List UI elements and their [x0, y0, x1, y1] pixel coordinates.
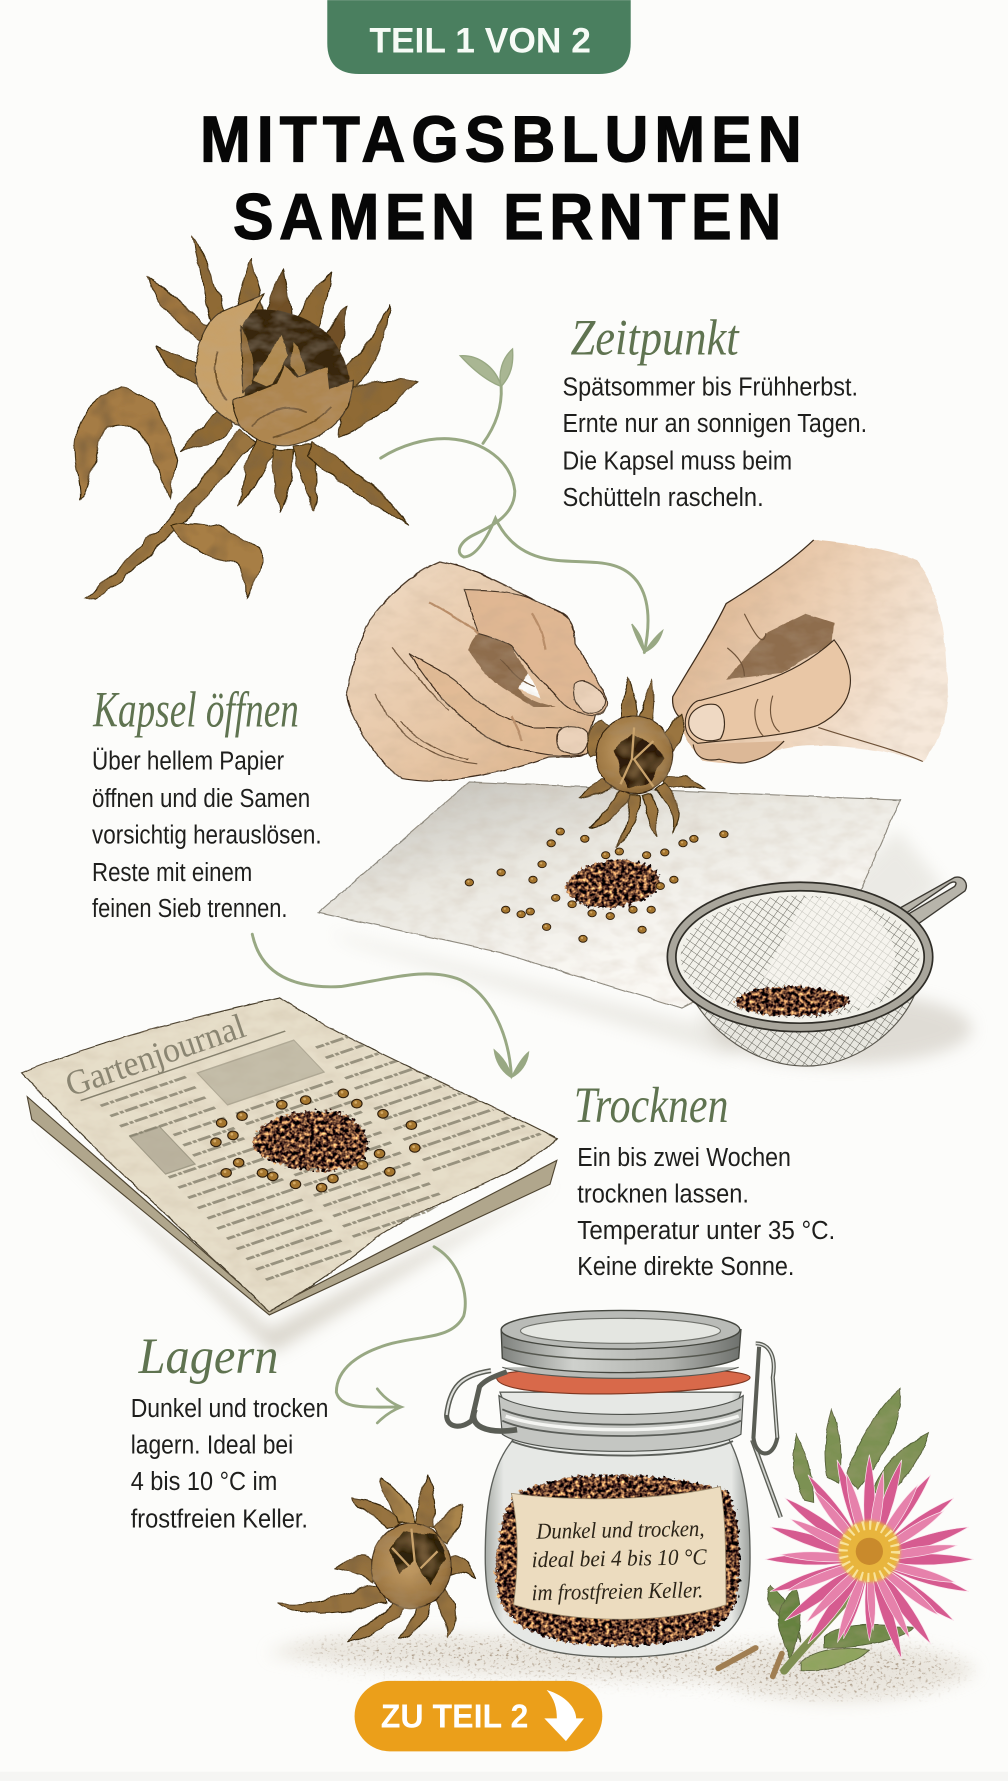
heading and text: Zeitpunkt: Ernte nur an sonnigen Tagen. [563, 410, 867, 438]
heading and text: Lagern: lagern. Ideal bei [131, 1432, 293, 1460]
heading and text: Kapsel oeffnen: feinen Sieb trennen. [92, 895, 288, 923]
illustration: jar with seeds and label [447, 1310, 781, 1657]
title [200, 104, 808, 253]
ground shadow and soil [267, 1633, 977, 1702]
title: MITTAGSBLUMEN [200, 104, 808, 176]
icon: curved down arrow [544, 1690, 584, 1741]
heading and text: Zeitpunkt: Die Kapsel muss beim [563, 447, 792, 475]
button: zu Teil 2: ZU TEIL 2 [381, 1697, 528, 1734]
illustration: pink flower with leaves [718, 1389, 974, 1676]
heading and text: Trocknen: Trocknen [574, 1077, 728, 1134]
heading and text: Kapsel oeffnen: Kapsel öffnen [92, 681, 299, 738]
title: SAMEN ERNTEN [233, 181, 787, 253]
heading and text: Kapsel oeffnen: Über hellem Papier [92, 747, 285, 775]
heading and text: Trocknen [574, 1077, 835, 1281]
heading and text: Zeitpunkt: Spätsommer bis Frühherbst. [563, 374, 858, 402]
heading and text: Lagern: 4 bis 10 °C im [131, 1468, 277, 1496]
illustration: paper with seeds [318, 782, 943, 1057]
heading and text: Kapsel oeffnen: vorsichtig herauslösen. [92, 821, 322, 849]
heading and text: Trocknen: trocknen lassen. [577, 1180, 749, 1208]
heading and text: Trocknen: Keine direkte Sonne. [577, 1253, 794, 1281]
illustration: jar with seeds and label: ideal bei 4 bis 10 °C [531, 1544, 708, 1572]
heading and text: Trocknen: Temperatur unter 35 °C. [577, 1217, 835, 1245]
button: zu Teil 2 [355, 1681, 602, 1751]
arrow: Zeitpunkt to hands [381, 349, 663, 652]
heading and text: Zeitpunkt: Schütteln rascheln. [563, 484, 764, 512]
illustration: jar with seeds and label: im frostfreien Keller. [531, 1577, 703, 1605]
illustration: jar with seeds and label: Dunkel und trocken, [535, 1516, 705, 1544]
heading and text: Lagern: frostfreien Keller. [131, 1505, 308, 1533]
tab: Teil 1 von 2 [327, 0, 631, 74]
illustration: sieve with seeds [672, 877, 972, 1066]
illustration: capsule held between fingers [580, 676, 705, 847]
illustration: left hand [347, 562, 608, 781]
illustration: right hand [673, 540, 948, 763]
heading and text: Lagern: Dunkel und trocken [131, 1395, 328, 1423]
heading and text: Kapsel oeffnen [92, 681, 322, 923]
illustration: dried capsule on ground [278, 1474, 475, 1642]
heading and text: Lagern: Lagern [138, 1328, 278, 1385]
heading and text: Zeitpunkt: Zeitpunkt [570, 310, 740, 367]
tab: Teil 1 von 2: TEIL 1 VON 2 [369, 21, 591, 60]
illustration: newspaper with seeds [22, 991, 578, 1352]
heading and text: Kapsel oeffnen: Reste mit einem [92, 859, 252, 887]
heading and text: Kapsel oeffnen: öffnen und die Samen [92, 785, 310, 813]
arrow: Kapsel to Trocknen [252, 934, 528, 1077]
heading and text: Trocknen: Ein bis zwei Wochen [577, 1144, 791, 1172]
heading and text: Lagern [131, 1328, 328, 1533]
illustration: dried flower head [75, 236, 418, 600]
illustration: newspaper with seeds: Gartenjournal [60, 1006, 251, 1104]
heading and text: Zeitpunkt [563, 310, 867, 512]
arrow: Trocknen to Lagern [336, 1247, 465, 1423]
